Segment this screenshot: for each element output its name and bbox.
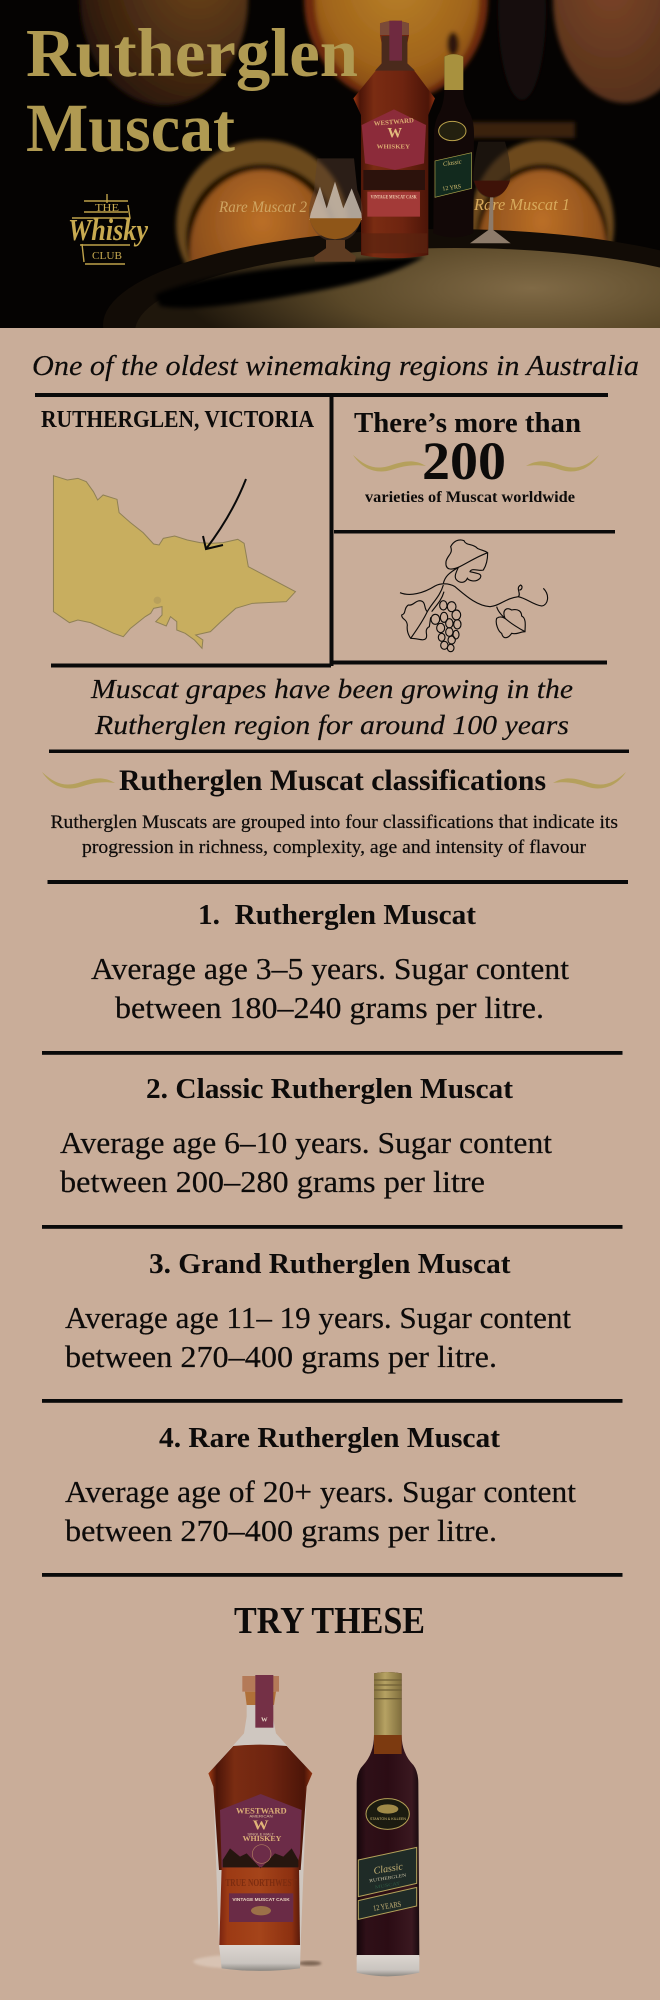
label: AMERICAN [249,1814,273,1818]
map of Victoria [53,476,295,648]
barrel: top left [80,0,248,105]
heading 3: 3. Grand Rutherglen Muscat [149,1249,511,1280]
bottle: Westward whiskey [193,1675,321,1971]
panel: hero photo header [0,0,660,428]
label: classic band: MUSCAT [375,1882,401,1891]
barrel top surface [0,229,660,428]
panel: classification 1: between 180–240 grams per litre. [115,990,544,1025]
intro line 2: progression in richness, complexity, age and intensity of flavour [82,838,586,858]
barrel: top centre [304,0,488,101]
bottle: Westward whiskey: TRUE NORTHWEST [225,1878,297,1889]
label: classic band [358,1847,417,1919]
panel: classification 2: between 200–280 grams per litre [60,1164,485,1199]
cask panel [229,1893,293,1922]
title: Rutherglen [26,15,358,91]
panel: classification 3 [65,1249,571,1374]
bottle: Westward in photo: VINTAGE MUSCAT CASK [371,196,417,201]
label: crest: STANTON & KILLEEN [370,1817,407,1821]
glass: wine glass [470,142,511,243]
barrel: middle left [176,140,348,330]
panel: classification 1 [91,900,569,1025]
glass: crystal tumbler [309,158,363,262]
label: classic band: Classic [373,1861,404,1877]
bottle: Westward whiskey: W [261,1717,268,1724]
panel: classification 2 [60,1074,552,1199]
panel: classification 3: between 270–400 grams per litre. [65,1339,497,1374]
label: classic band: 12 YEARS [372,1900,402,1913]
heading: more than: There’s more than [354,407,581,439]
heading: try these: TRY THESE [234,1600,425,1642]
text 1: Average age 3–5 years. Sugar content [91,951,569,986]
bottle: Westward in photo: WESTWARD [374,117,414,128]
logo: The Whisky Club [68,194,148,264]
caption: varieties: varieties of Muscat worldwide [365,489,575,506]
history line 2: Rutherglen region for around 100 years [94,710,569,740]
label: WESTWARD [236,1806,287,1815]
heading: location: RUTHERGLEN, VICTORIA [41,407,315,433]
panel: classifications intro [42,764,626,858]
beam behind bottles [470,122,575,138]
text 2: Average age 6–10 years. Sugar content [60,1125,552,1160]
logo: The Whisky Club: CLUB [92,250,122,262]
panel: classification 4 [65,1423,576,1548]
label: SINGLE MALT [247,1832,274,1836]
text: grape history: Muscat grapes have been growing in the [90,674,573,704]
decorative swash left [353,455,426,471]
barrel: middle right [470,140,614,330]
label: classic band: RUTHERGLEN [369,1873,407,1884]
panel: region and varieties grid [35,393,615,668]
text 3: Average age 11– 19 years. Sugar content [65,1300,571,1335]
intro line 1: Rutherglen Muscats are grouped into four classifications that indicate its [50,813,618,833]
bottle: Westward in photo [353,21,435,258]
title line 2: Muscat [26,90,235,166]
tagline: One of the oldest winemaking regions in Australia [32,351,639,382]
label [220,1794,302,1868]
bottle: Westward in photo: WHISKEY [377,144,411,150]
text: grape history [90,674,573,740]
title [26,15,358,166]
decorative swash right [553,772,626,788]
decorative swash right [526,455,599,471]
chalk text: Rare Muscat 2 [218,199,307,216]
logo: The Whisky Club: Whisky [68,212,148,247]
arrow pointing to Rutherglen [203,479,246,549]
heading 4: 4. Rare Rutherglen Muscat [159,1423,501,1454]
label: crest [366,1799,409,1829]
heading 1: 1. Rutherglen Muscat [198,900,477,931]
bottle label [362,109,426,170]
logo: The Whisky Club: THE [95,202,119,214]
bottle: Classic in photo: Classic [443,158,462,168]
bottle: Classic Rutherglen Muscat [357,1672,419,1976]
icon: grape vine [400,540,548,652]
bottle: Classic in photo [433,54,474,237]
cask panel: VINTAGE MUSCAT CASK [232,1897,290,1902]
chalk text: Rare Muscat 1 [473,195,570,214]
bottle: Classic in photo: 12 YRS [442,184,462,193]
heading 2: 2. Classic Rutherglen Muscat [146,1074,514,1105]
decorative swash left [42,772,115,788]
barrel: top right [498,0,660,103]
panel: classification 4: between 270–400 grams per litre. [65,1513,497,1548]
label: W [253,1818,269,1833]
bottle: Westward in photo: W [387,125,402,141]
bottle label [439,121,466,141]
label: WHISKEY [243,1834,282,1843]
statistic: 200: 200 [422,431,506,491]
heading: classifications: Rutherglen Muscat classifications [119,764,546,797]
text 4: Average age of 20+ years. Sugar content [65,1474,576,1509]
